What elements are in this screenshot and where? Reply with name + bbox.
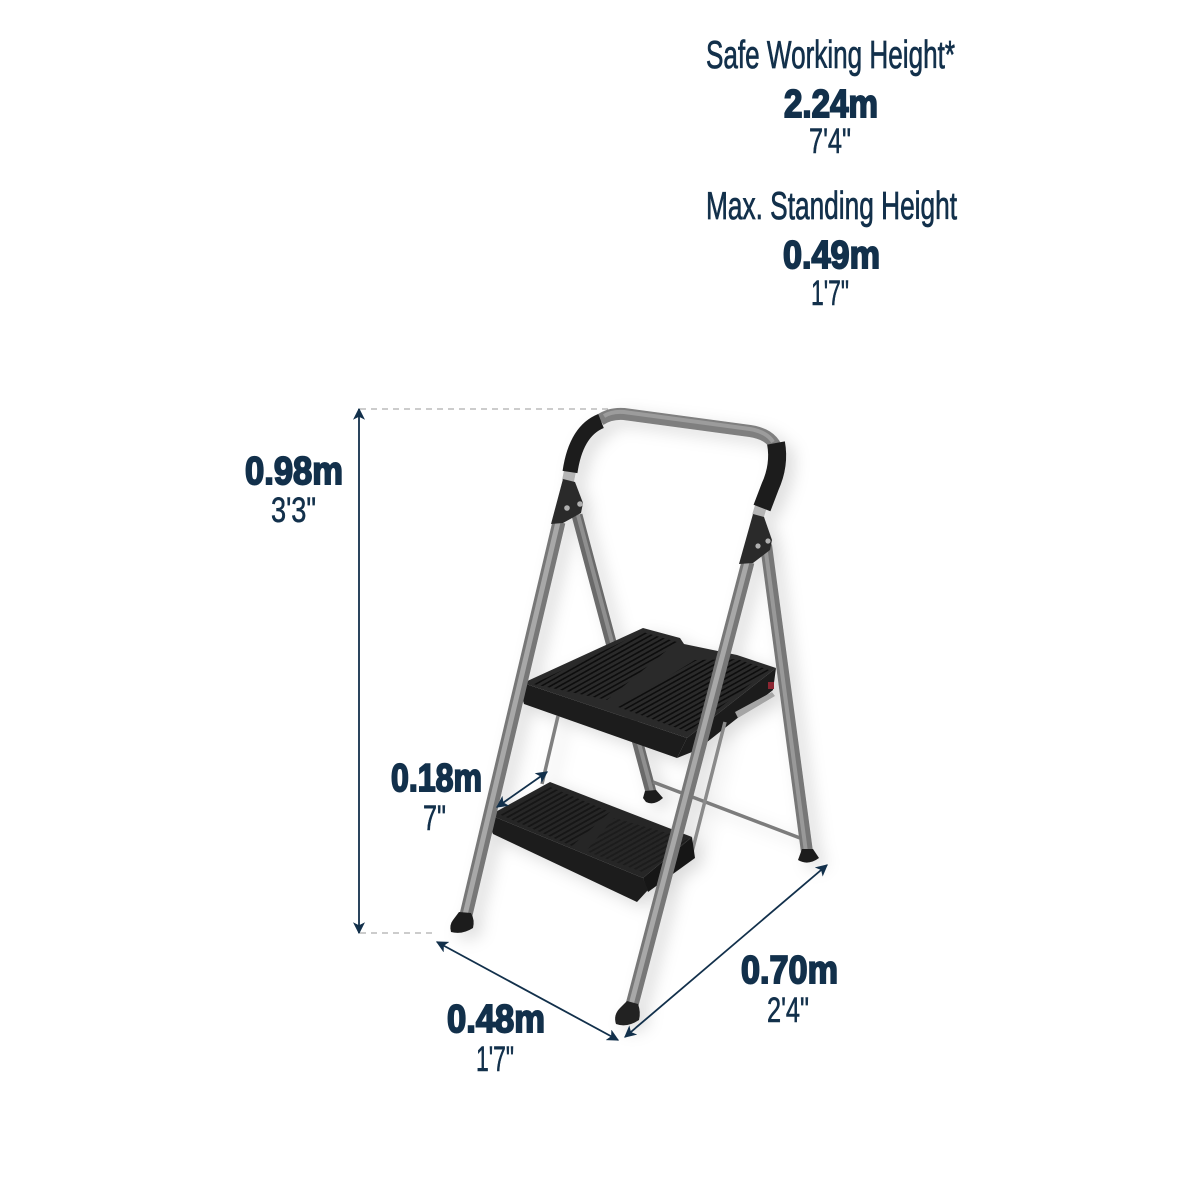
heading: max standing height: 0.49m [783,234,880,277]
heading: max standing height: 1'7" [811,274,849,313]
heading: safe working height: 7'4" [809,122,851,161]
dimension: depth: 0.70m [741,949,838,992]
left silver collar [568,471,570,481]
dimension: step spacing: 0.18m [391,757,482,800]
heading: max standing height [706,185,957,313]
left foam grip [570,421,601,472]
upper step ridges, right half [618,659,768,732]
step ladder illustration [450,412,819,1025]
infographic canvas [246,39,958,1072]
rear right leg [765,545,807,852]
front right leg [631,562,748,1005]
heading: max standing height: Max. Standing Height [706,185,957,228]
upper step front face [522,683,687,758]
upper step latch [768,682,774,689]
heading: safe working height: 2.24m [784,83,878,126]
right hinge bracket [739,514,772,564]
heading: safe working height: Safe Working Height* [706,34,955,77]
rear cross bar [653,782,800,838]
upper step hinge bracket [735,692,775,718]
lower step [492,782,704,910]
dimension: depth [625,865,838,1037]
right foam grip [762,443,777,508]
lower step tread [490,782,692,878]
rear left foot [643,790,663,803]
dimension: step spacing [391,757,547,838]
rear right foot [798,849,819,863]
right silver collar [758,506,761,516]
upper step ridges, left half [534,632,676,700]
upper step [523,628,782,768]
lower step ridges, right half [588,818,688,872]
lower step side face [643,837,695,892]
front left foot [450,912,474,933]
front left leg [465,522,559,915]
dimension: step spacing: 7" [423,799,446,838]
lower step ridges, left half [501,787,610,846]
dimension: overall height: 0.98m [245,450,343,493]
dimension: overall height [245,409,610,933]
heading: safe working height [706,34,955,161]
dimension: depth: 2'4" [767,991,809,1030]
top rail [600,412,776,447]
dimension: width: 1'7" [476,1040,514,1079]
dimension: overall height: 3'3" [271,491,316,530]
rear left leg [577,515,652,792]
left hinge bracket [551,479,583,524]
dimension: width [437,942,618,1079]
upper step tread [523,628,776,738]
lower step front face [490,815,648,902]
right support rod [690,722,725,860]
left support rod [542,716,558,784]
upper step side face [677,668,776,758]
dimension: width: 0.48m [447,998,545,1041]
front right foot [615,1001,640,1025]
